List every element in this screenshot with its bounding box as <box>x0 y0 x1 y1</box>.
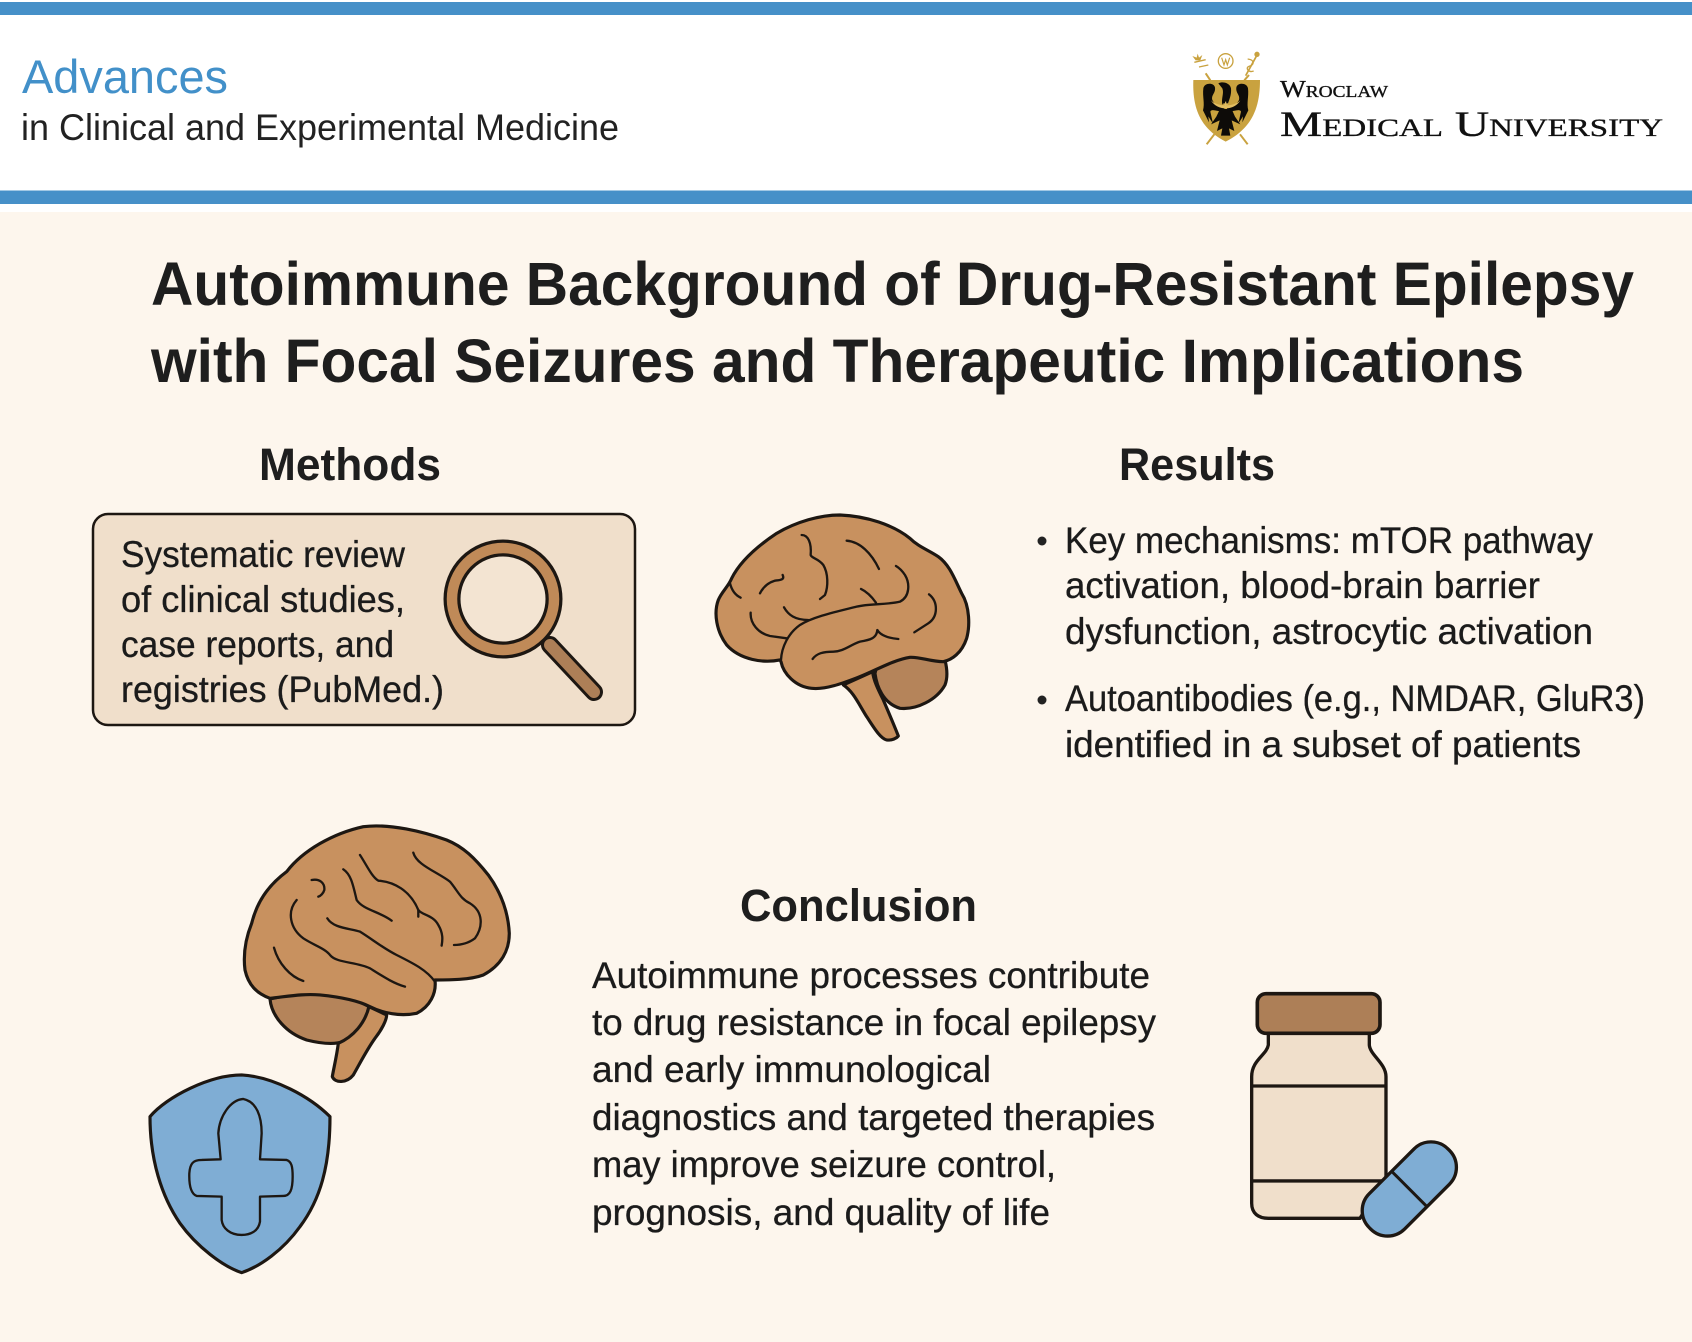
conclusion text: prognosis, and quality of life <box>592 1192 1050 1233</box>
conclusion text: Autoimmune processes contribute <box>592 955 1150 996</box>
results list: Key mechanisms: mTOR pathway <box>1065 520 1593 561</box>
methods text: of clinical studies, <box>121 579 405 620</box>
methods text <box>121 534 444 710</box>
capsule <box>1352 1132 1466 1246</box>
icon: university crest <box>1192 52 1260 144</box>
heading: Methods: Methods <box>259 439 441 490</box>
journal name <box>21 50 619 148</box>
journal name: in Clinical and Experimental Medicine <box>21 107 619 148</box>
icon: magnifying glass <box>452 548 594 692</box>
bottle body <box>1252 1033 1386 1218</box>
university name: Wroclaw <box>1280 77 1389 103</box>
heading: Conclusion: Conclusion <box>740 880 977 931</box>
conclusion text: and early immunological <box>592 1049 991 1090</box>
conclusion text: to drug resistance in focal epilepsy <box>592 1002 1156 1043</box>
title: with Focal Seizures and Therapeutic Implications <box>150 327 1524 395</box>
results list: dysfunction, astrocytic activation <box>1065 611 1593 652</box>
panel: methods <box>93 514 635 725</box>
methods text: case reports, and <box>121 624 394 665</box>
conclusion text: diagnostics and targeted therapies <box>592 1097 1155 1138</box>
icon: brain (conclusion) <box>244 826 509 1081</box>
header band <box>0 0 1692 212</box>
results list <box>1038 520 1645 765</box>
results list: activation, blood-brain barrier <box>1065 565 1540 606</box>
bottle cap <box>1257 994 1380 1033</box>
journal name: Advances <box>22 50 228 103</box>
methods text: registries (PubMed.) <box>121 669 444 710</box>
heading: Results: Results <box>1119 439 1275 490</box>
results list: identified in a subset of patients <box>1065 724 1581 765</box>
results list: Autoantibodies (e.g., NMDAR, GluR3) <box>1065 678 1645 719</box>
icon: shield with cross <box>150 1075 330 1273</box>
university name: Medical University <box>1280 104 1663 144</box>
conclusion text <box>592 955 1156 1233</box>
title: Autoimmune Background of Drug-Resistant Epilepsy <box>151 250 1634 318</box>
title <box>150 250 1634 395</box>
methods text: Systematic review <box>121 534 405 575</box>
icon: brain (results) <box>716 515 969 740</box>
university name <box>1280 77 1663 144</box>
conclusion text: may improve seizure control, <box>592 1144 1056 1185</box>
icon: pill bottle and capsule <box>1252 994 1466 1246</box>
